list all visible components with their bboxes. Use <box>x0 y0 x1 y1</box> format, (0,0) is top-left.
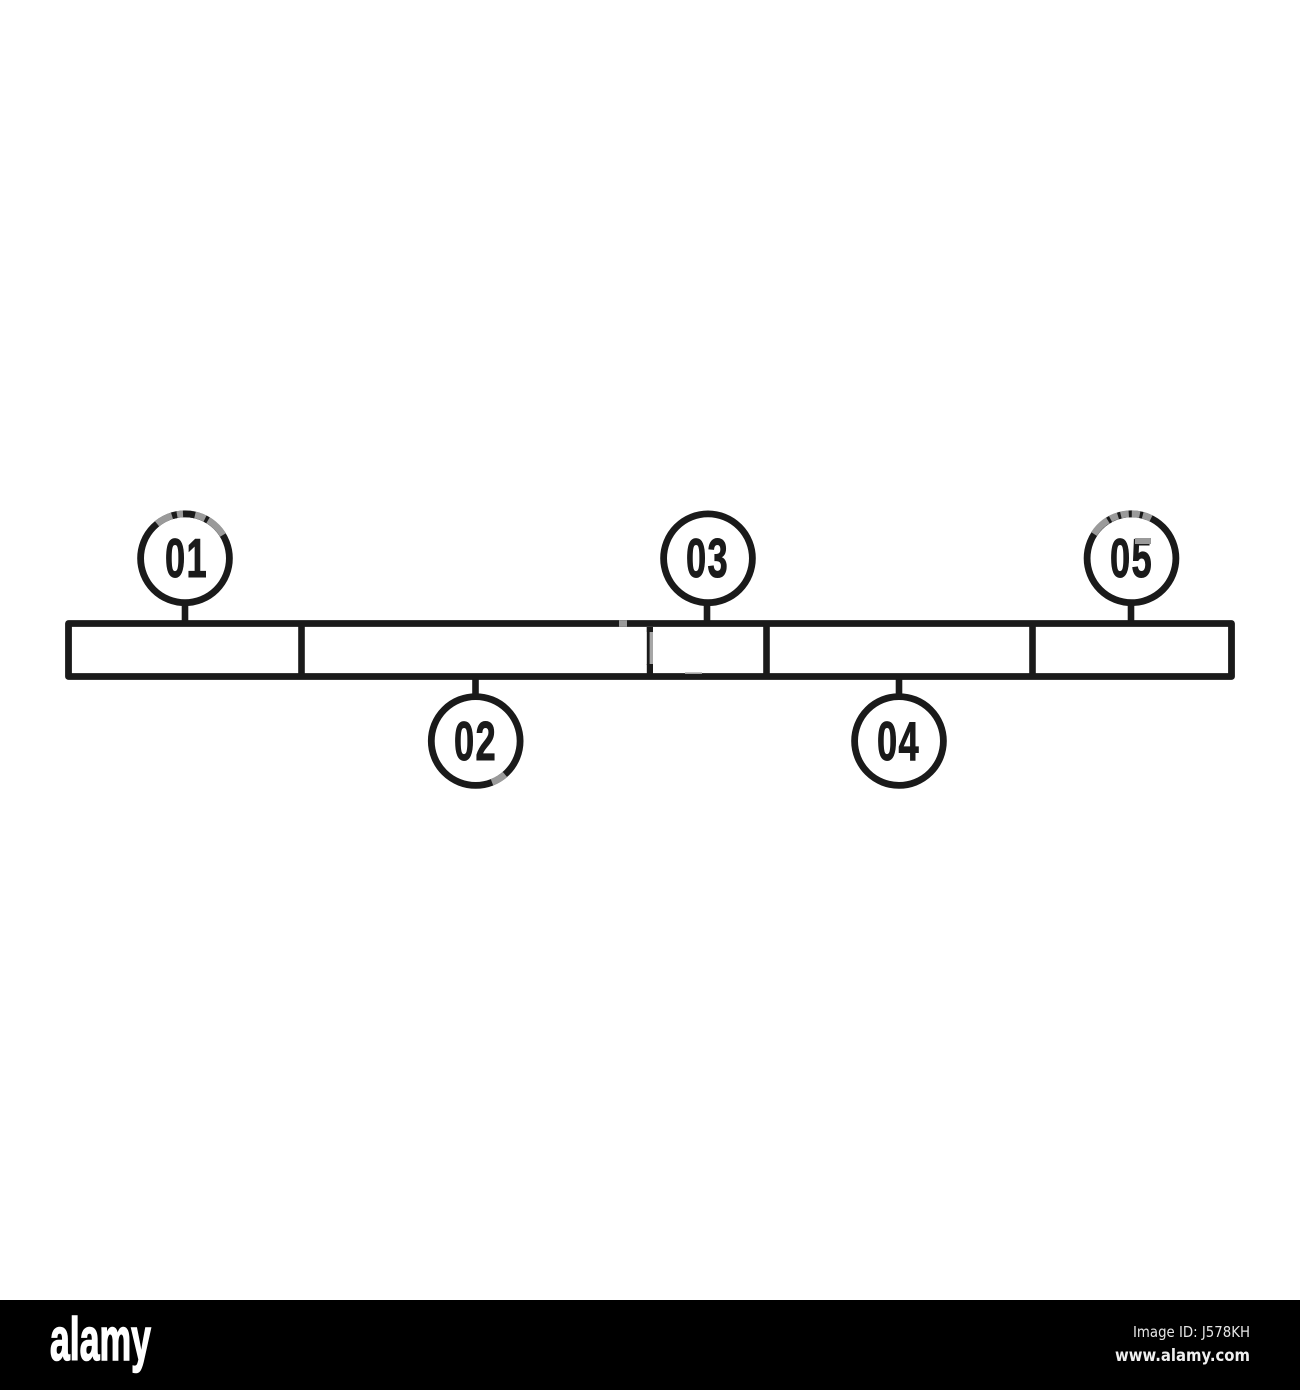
marker 04 <box>855 679 943 785</box>
marker 03 <box>664 514 752 621</box>
marker 01 <box>141 514 229 621</box>
marker 05: 05 <box>1110 527 1153 589</box>
marker 02: 02 <box>454 710 497 772</box>
logo text: alamy <box>50 1306 151 1373</box>
marker 05 <box>1087 514 1176 621</box>
footer band <box>0 1300 1300 1390</box>
marker 01: 01 <box>165 527 208 589</box>
timeline bar <box>68 620 1232 677</box>
image id: Image ID: J578KH <box>1133 1323 1250 1341</box>
marker 02 <box>431 679 520 785</box>
website: www.alamy.com <box>1115 1346 1250 1365</box>
marker 03: 03 <box>686 527 729 589</box>
marker 04: 04 <box>877 710 920 772</box>
